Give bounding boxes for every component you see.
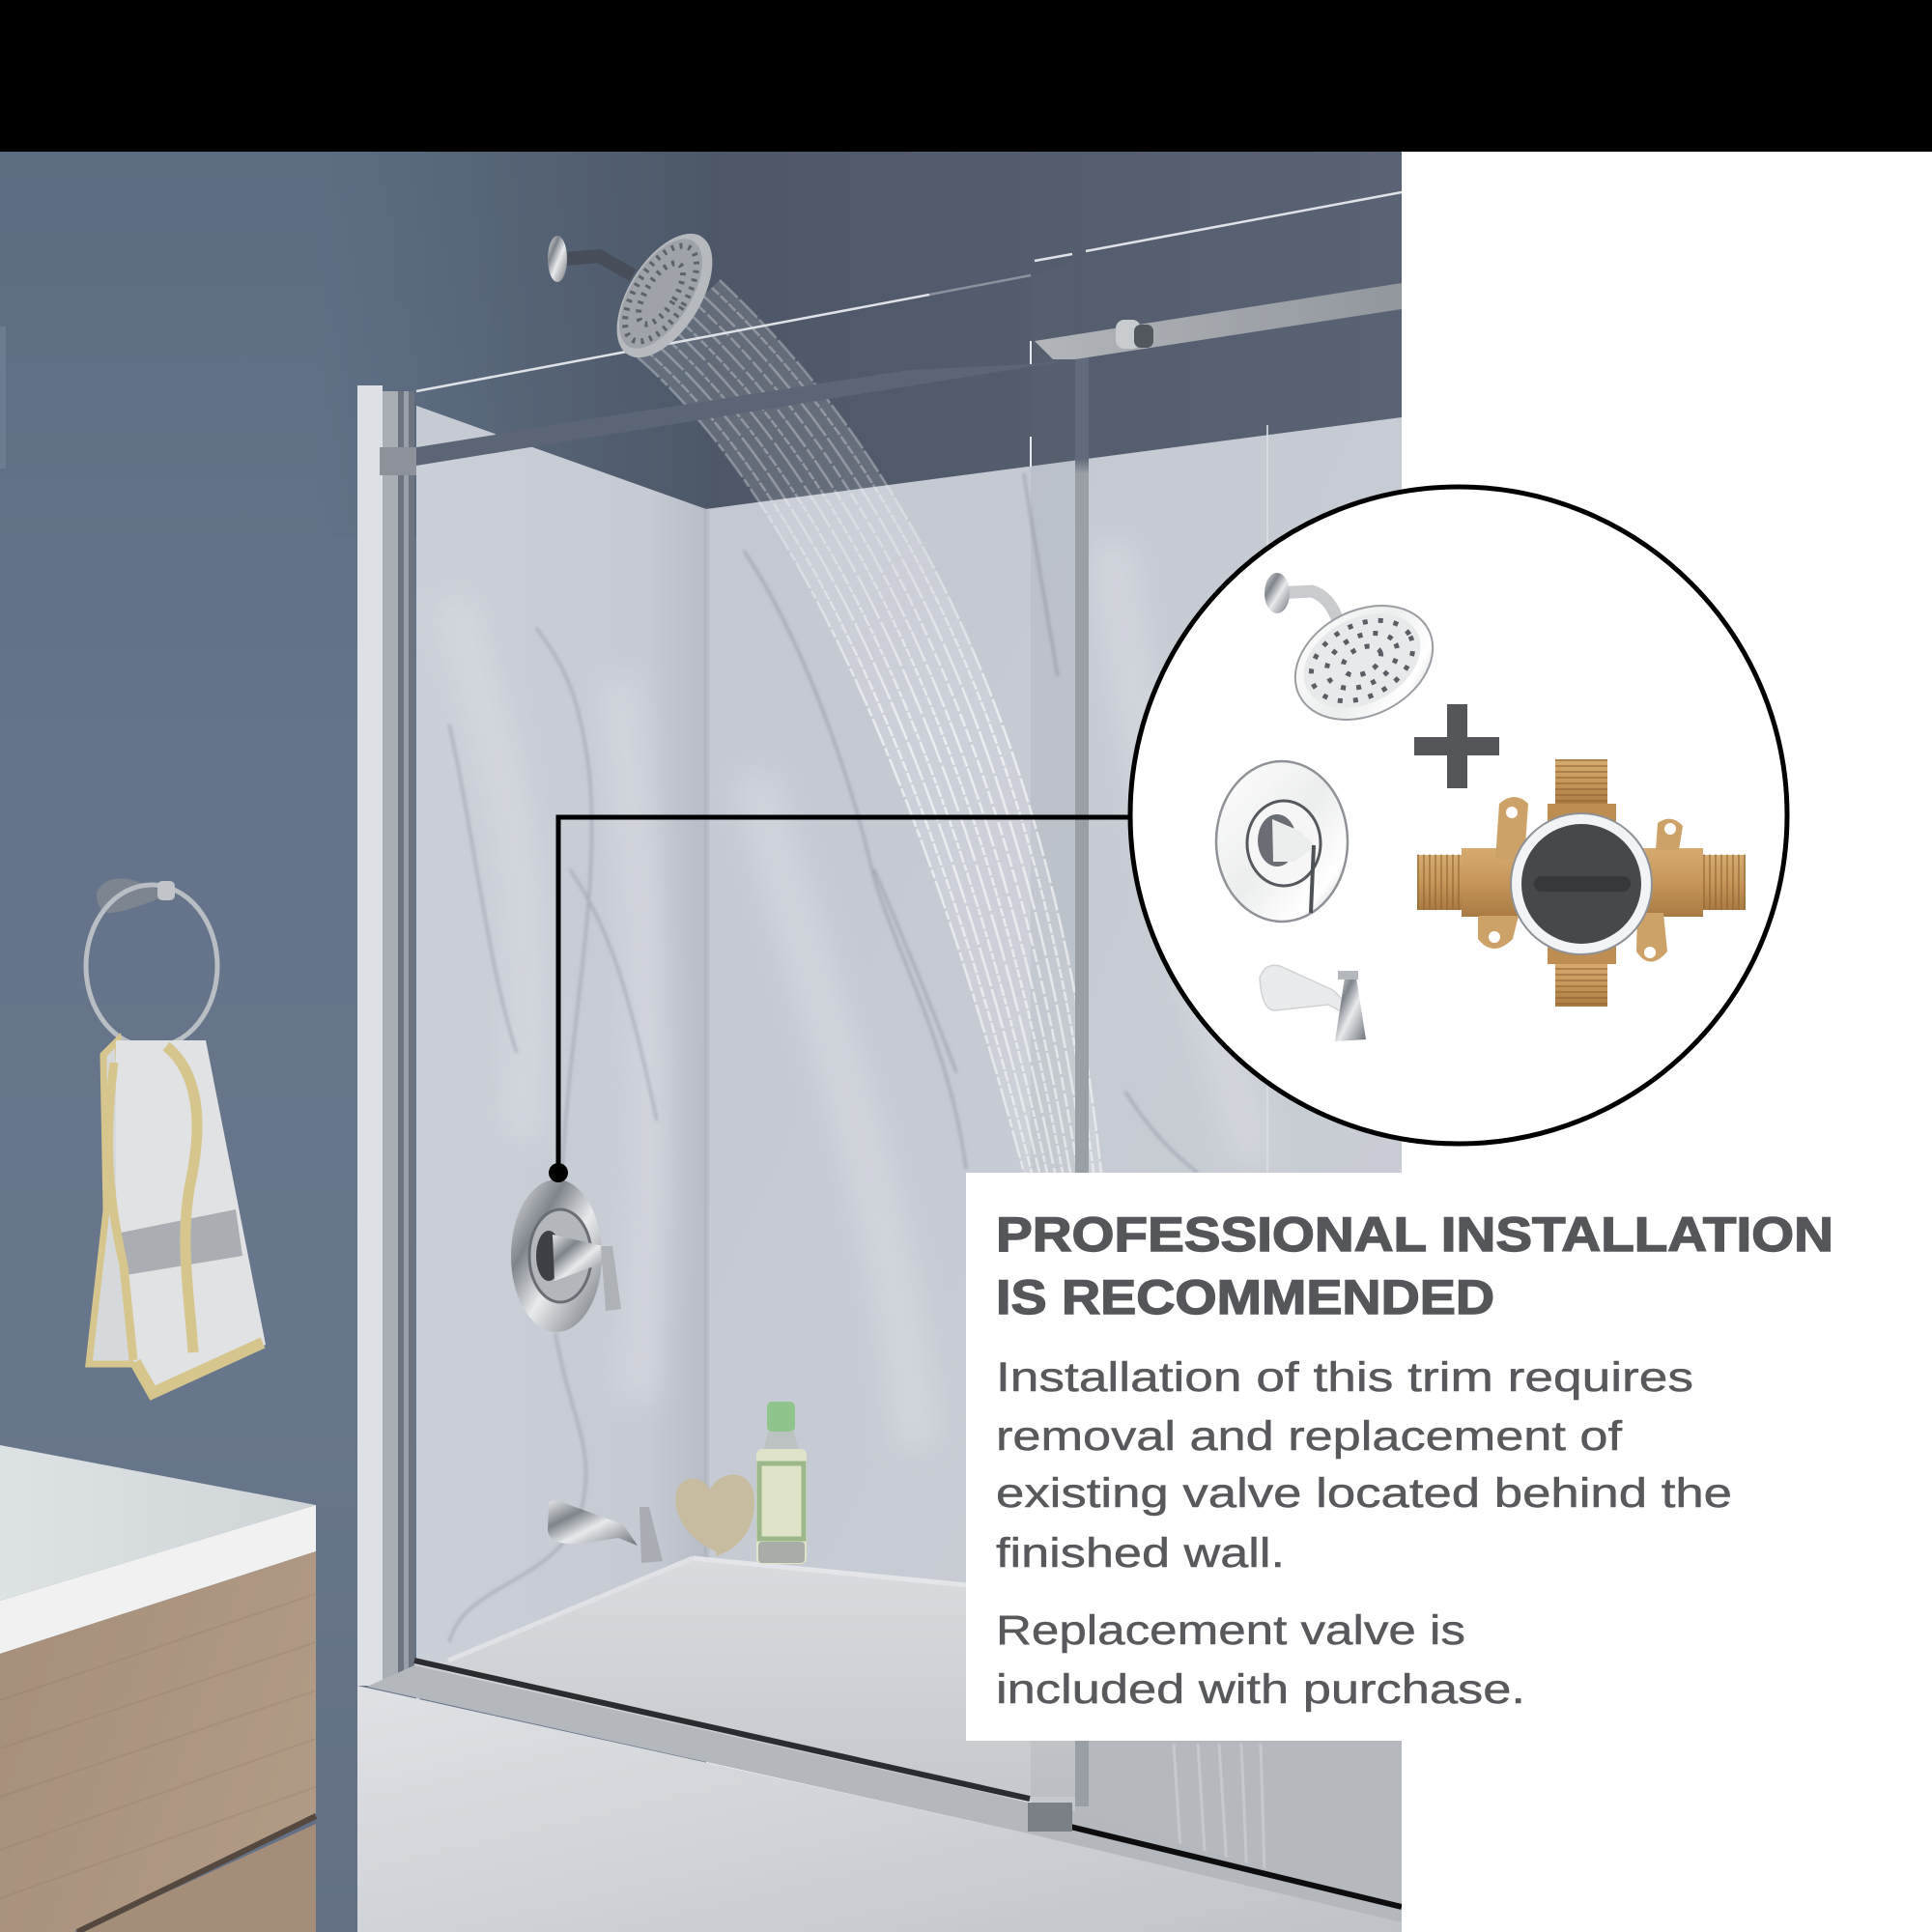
tub side ledge (448, 1558, 693, 1661)
rail bracket (380, 447, 416, 475)
lower door rail right (1035, 1818, 1402, 1907)
left thread lines (1417, 854, 1462, 910)
towel gold edge (166, 1046, 197, 1352)
towel ring (86, 879, 217, 1047)
marble back wall (706, 417, 1402, 1913)
interior corner shade (704, 509, 709, 1562)
back wall (706, 152, 1402, 538)
icon: shower head (1264, 573, 1452, 742)
door thin edge lower (1030, 437, 1032, 467)
icon: plus sign (1414, 704, 1499, 788)
roller knob (1116, 320, 1153, 349)
vertical collars (1548, 804, 1616, 964)
tub interior (411, 1558, 1075, 1811)
heart sponge (675, 1475, 754, 1556)
countertop (0, 1445, 316, 1601)
drawer gap (77, 1816, 316, 1932)
towel (89, 1040, 266, 1399)
body paragraph two: Replacement valve is (996, 1607, 1465, 1654)
left thread (1417, 855, 1462, 910)
inner ring (529, 1209, 591, 1302)
spray glow (638, 280, 1101, 1173)
bottle body (756, 1449, 807, 1564)
spray streams (638, 280, 1101, 1173)
black top band (0, 0, 1932, 152)
flange (1264, 573, 1290, 613)
label art (759, 1463, 804, 1539)
white right margin (1402, 152, 1932, 1932)
diverter knob (1338, 971, 1358, 980)
door jamb (357, 385, 383, 1686)
black cap (1521, 824, 1641, 944)
bottom-left ear (1478, 916, 1519, 949)
towel back fold (89, 1040, 135, 1364)
door rail dark section (416, 359, 1075, 466)
head (597, 217, 732, 374)
bottle neck (764, 1432, 798, 1449)
towel front (116, 1040, 266, 1399)
top-left ear (1495, 797, 1528, 860)
right thread lines (1703, 854, 1746, 910)
top thread (1555, 759, 1607, 806)
diverter (1335, 978, 1366, 1041)
white ring (1511, 813, 1652, 954)
text panel (966, 1173, 1846, 1741)
wall shade by corner (319, 152, 706, 538)
connector line to valve (549, 817, 1132, 1182)
trim plate (511, 1179, 602, 1332)
right lower panel (1072, 1741, 1402, 1915)
arm (1277, 591, 1337, 618)
track roller (1028, 1803, 1072, 1832)
marble corner seen through glass (416, 406, 496, 447)
spout body (1260, 965, 1350, 1016)
heading: PROFESSIONAL INSTALLATION (996, 1208, 1833, 1262)
left wall (0, 152, 706, 1932)
body paragraph one: finished wall. (996, 1530, 1285, 1577)
right thread (1703, 855, 1746, 910)
tub track (367, 1665, 1402, 1922)
door rail metal section (1035, 283, 1402, 359)
icon: tub spout (1260, 965, 1366, 1041)
bottle (756, 1402, 807, 1564)
bathroom scene (0, 152, 1402, 1932)
body paragraph two: included with purchase. (996, 1666, 1525, 1713)
top thread lines (1555, 759, 1607, 806)
handle (553, 1235, 607, 1281)
nozzles (611, 235, 711, 353)
lower door rail (414, 1661, 1030, 1799)
tub front (357, 1686, 1402, 1932)
bottom thread (1555, 962, 1607, 1007)
horizontal body (1462, 848, 1703, 917)
callout circle (1130, 487, 1787, 1144)
door vertical bar (1075, 357, 1089, 1806)
head rim (1276, 583, 1452, 742)
flange (548, 236, 567, 282)
lower panel water streaks (1174, 1744, 1265, 1903)
bottom-right ear (1636, 913, 1667, 962)
body paragraph one: existing valve located behind the (996, 1470, 1732, 1517)
base (758, 1542, 805, 1563)
body paragraph one: removal and replacement of (996, 1413, 1623, 1460)
body paragraph one (996, 1354, 1732, 1577)
side wall veins (449, 628, 657, 1642)
cap (767, 1402, 795, 1432)
top-right ear (1656, 819, 1683, 850)
icon: brass rough-in valve (1417, 759, 1746, 1007)
bottom thread lines (1555, 962, 1607, 1007)
back wall veins (744, 473, 1198, 1173)
tub spout (548, 1500, 663, 1563)
face (1288, 595, 1436, 726)
marble side wall (416, 406, 706, 1700)
icon: trim plate (1216, 761, 1348, 922)
counter edge (0, 1505, 316, 1654)
glass door tint (1031, 261, 1075, 1797)
back wall pale clouds (753, 541, 1256, 1449)
cap handle (1534, 876, 1631, 892)
lower drawer (80, 1824, 316, 1932)
towel gold hem (135, 1343, 263, 1393)
upper glass edges (416, 192, 1402, 391)
shower head in scene (548, 217, 732, 374)
hub (1258, 814, 1296, 867)
lever (1311, 845, 1314, 913)
vanity (0, 1445, 316, 1932)
wood front (0, 1551, 316, 1932)
body paragraph two (996, 1607, 1525, 1713)
ring mount (97, 879, 172, 913)
wall switch edge (0, 327, 6, 469)
chrome frame (383, 391, 414, 1686)
panel seam (1266, 425, 1268, 1173)
tub back ledge (693, 1558, 1075, 1596)
body paragraph one: Installation of this trim requires (996, 1354, 1693, 1401)
valve trim in scene (511, 1179, 621, 1332)
heading (996, 1208, 1833, 1324)
ring knuckle (157, 881, 175, 900)
lever (601, 1246, 621, 1311)
arm (565, 256, 633, 275)
water spray (638, 280, 1101, 1173)
towel grey stripe (121, 1209, 242, 1275)
door thin edge upper (1030, 341, 1032, 364)
wood grain (0, 1594, 316, 1898)
side wall pale clouds (454, 599, 650, 1401)
ring (86, 885, 217, 1047)
face (603, 225, 719, 362)
hub (536, 1231, 561, 1281)
inner ring (1247, 801, 1321, 886)
heading: IS RECOMMENDED (996, 1270, 1494, 1324)
towel gold side (109, 1063, 133, 1360)
plate (1216, 761, 1348, 922)
handle (1272, 819, 1316, 862)
nozzles (1297, 605, 1427, 717)
